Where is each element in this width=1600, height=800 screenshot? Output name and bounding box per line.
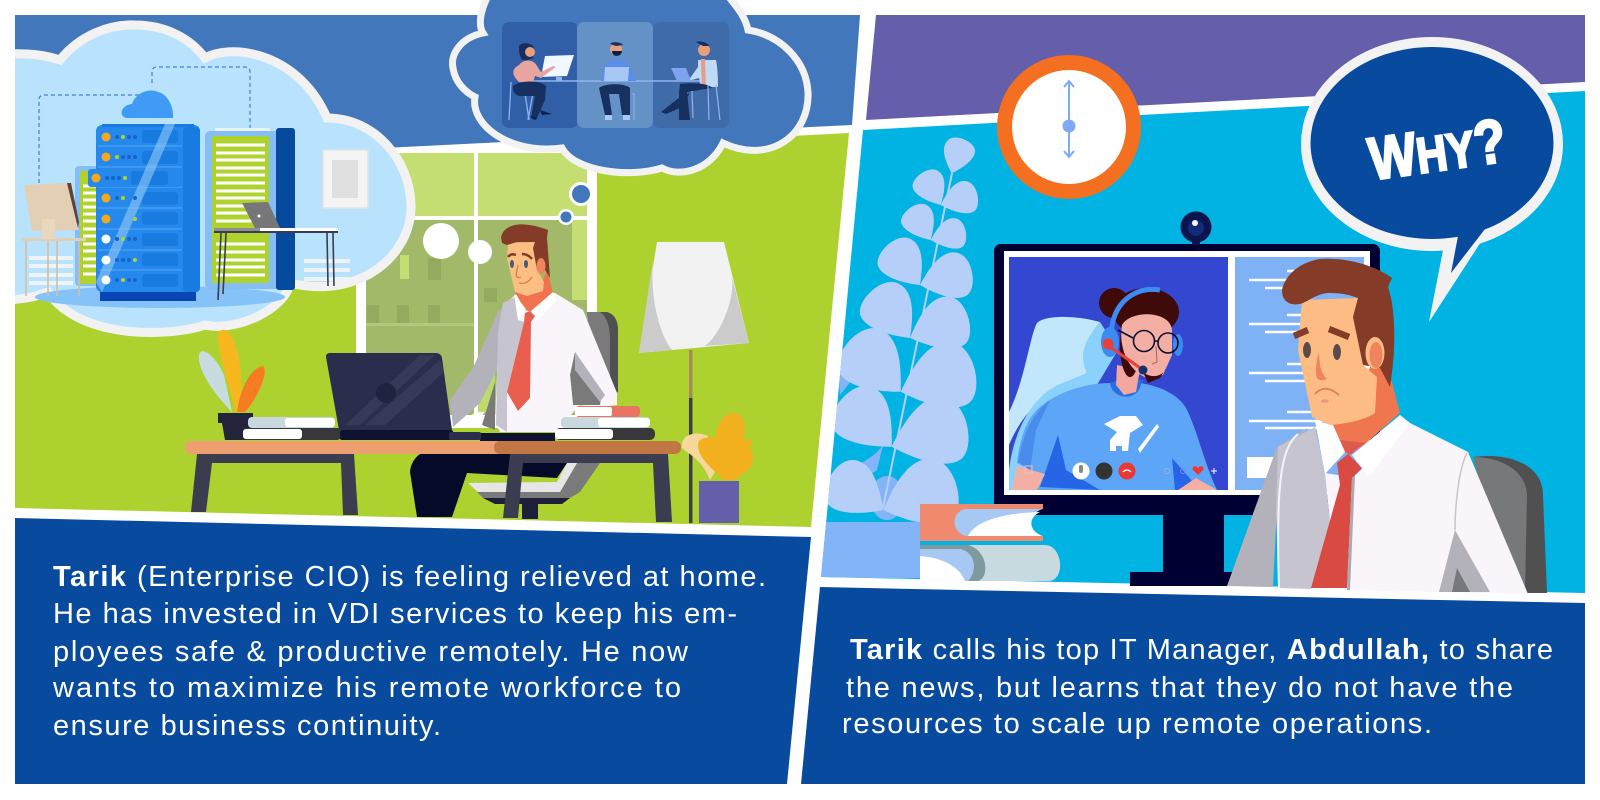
call controls xyxy=(1025,462,1217,480)
video call: Abdullah xyxy=(1009,257,1228,490)
office chair back xyxy=(468,312,618,519)
face xyxy=(507,242,544,296)
laptop xyxy=(326,353,481,440)
arm xyxy=(450,298,510,427)
caption text right: Tarik calls his top IT Manager, Abdullah, to share xyxy=(850,634,1553,666)
shirt xyxy=(1017,383,1217,490)
caption text left: He has invested in VDI services to keep his em- xyxy=(53,598,737,630)
panel: left caption xyxy=(15,518,811,784)
hair xyxy=(501,224,550,278)
vest side xyxy=(496,297,524,432)
shared table xyxy=(528,80,700,82)
office chair xyxy=(1473,456,1547,593)
person: bearded man with laptop xyxy=(599,42,636,120)
books: left stack xyxy=(243,417,341,440)
laptop desk xyxy=(214,202,338,300)
green rack xyxy=(205,128,295,290)
neck xyxy=(515,270,553,312)
glasses xyxy=(1118,330,1178,353)
shirt xyxy=(1325,423,1528,594)
window xyxy=(356,150,597,428)
collar xyxy=(1315,421,1345,474)
caption text right xyxy=(842,634,1553,740)
cloud: collaboration thought xyxy=(452,0,808,173)
clock xyxy=(997,55,1141,199)
cloud: server room thought xyxy=(5,25,411,333)
arm xyxy=(1227,428,1307,587)
caption text right: the news, but learns that they do not have the xyxy=(846,672,1513,704)
headset xyxy=(1109,286,1160,329)
webcam xyxy=(1180,212,1212,245)
floor glow xyxy=(35,286,285,308)
plant: tall blue xyxy=(819,132,979,578)
cloud icon xyxy=(122,90,173,118)
caption text right: resources to scale up remote operations. xyxy=(842,708,1432,740)
dashed network lines xyxy=(38,66,251,183)
brows and eyes xyxy=(1294,329,1349,403)
features xyxy=(508,254,532,283)
imac desk xyxy=(22,183,86,296)
character: Tarik worried xyxy=(1227,259,1528,594)
books: right stack xyxy=(555,406,655,440)
face xyxy=(1121,314,1172,378)
team panel backgrounds xyxy=(502,22,578,128)
ear xyxy=(1366,337,1384,369)
shirt logo xyxy=(1104,416,1159,453)
plant: yellow potted xyxy=(682,413,753,523)
character: Tarik relieved xyxy=(410,224,617,517)
under-arm chair gap xyxy=(570,352,602,405)
chair xyxy=(1009,317,1100,445)
panel: right scene xyxy=(819,15,1585,594)
panel: left scene xyxy=(5,0,860,527)
microphone xyxy=(1110,346,1140,369)
picture frame xyxy=(323,150,368,208)
hair xyxy=(1099,288,1126,318)
tie xyxy=(1311,454,1362,588)
why text: WHY? xyxy=(1364,106,1510,194)
sky background xyxy=(15,15,860,166)
desk xyxy=(185,441,681,522)
tie xyxy=(507,311,535,411)
neck xyxy=(1333,360,1400,452)
back rack left xyxy=(75,166,96,286)
chat lines xyxy=(1249,271,1345,428)
panel: right caption xyxy=(801,587,1585,784)
collar xyxy=(514,294,526,320)
thought bubbles xyxy=(423,182,593,264)
pot xyxy=(821,522,920,578)
ear xyxy=(536,258,546,274)
person: woman with monitor xyxy=(509,43,574,120)
torso xyxy=(495,293,617,432)
server rack xyxy=(88,124,200,301)
hair xyxy=(1282,259,1394,387)
face xyxy=(1298,298,1377,425)
vest side xyxy=(1276,427,1330,589)
person: man with tie and laptop xyxy=(661,41,720,120)
caption text left: wants to maximize his remote workforce to xyxy=(52,672,681,704)
trousers xyxy=(410,454,567,517)
caption text left xyxy=(52,561,766,742)
lamp xyxy=(639,242,749,523)
plant: desk leaves xyxy=(199,330,265,440)
small stacks xyxy=(29,256,350,285)
caption text left: Tarik (Enterprise CIO) is feeling relieved at home. xyxy=(53,561,766,593)
monitor xyxy=(994,212,1380,586)
belt xyxy=(480,433,555,442)
purple wall band xyxy=(866,15,1585,120)
green wall xyxy=(15,133,849,527)
books: blue stack xyxy=(920,504,1060,581)
cyan wall xyxy=(821,91,1585,593)
caption text left: ensure business continuity. xyxy=(53,710,441,742)
neck xyxy=(1110,380,1144,397)
caption text left: ployees safe & productive remotely. He now xyxy=(53,636,689,668)
speech bubble xyxy=(1301,37,1563,322)
